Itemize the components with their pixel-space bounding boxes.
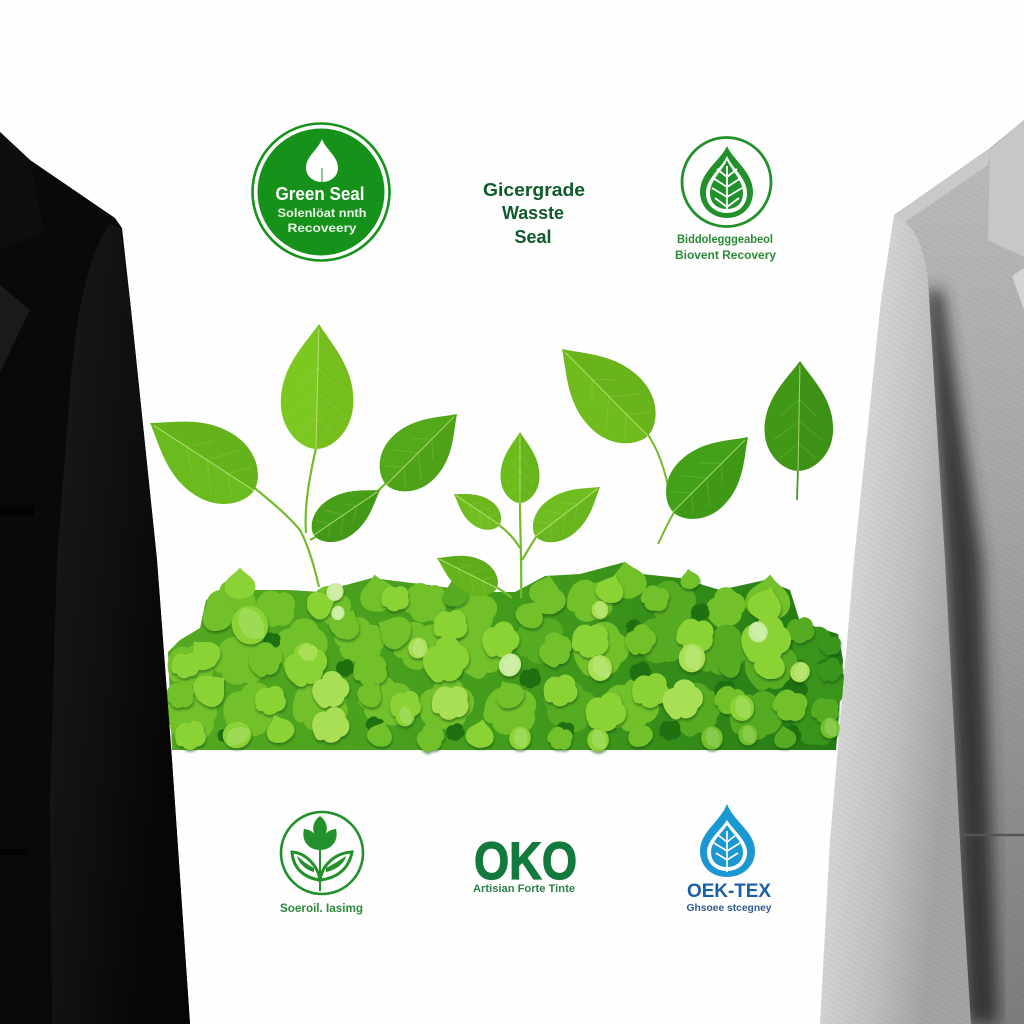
badge text: Recoveery [288, 221, 357, 235]
grey jacket shoulder [894, 148, 990, 222]
leaf: lower middle leaf [302, 473, 392, 552]
floating dark leaf with stem [651, 415, 770, 544]
badge text: Solenlöat nnth [278, 208, 366, 220]
text seal: Gicergrade Wasste Seal: Seal [514, 227, 552, 247]
plant: large seedling on the left [130, 323, 478, 587]
badge text [276, 184, 366, 235]
black jacket [0, 132, 190, 1024]
icon: blue drop with leaf [700, 804, 755, 877]
logo: OKO: OKO [474, 832, 577, 891]
badge caption: Soeroil. Iasimg [280, 901, 363, 915]
black pocket flaps [0, 505, 34, 855]
text seal: Gicergrade Wasste Seal: Wasste [502, 203, 564, 223]
leaf: top large leaf [280, 323, 355, 450]
grey jacket shadow along the sleeve seam [926, 290, 998, 1024]
icon: sprout [292, 816, 352, 891]
black collar [0, 132, 44, 250]
badge caption [675, 232, 776, 262]
grey pocket seam [963, 834, 1024, 836]
leaf: small right leaf [523, 470, 613, 553]
foliage pile [155, 558, 854, 756]
grey collar [988, 120, 1024, 257]
logo text: OEK-TEX [687, 881, 771, 902]
badge: plant circle [280, 812, 363, 915]
logo: OKO: Artisian Forte Tinte [473, 883, 575, 895]
grey jacket [820, 120, 1024, 1024]
floating leaf with stem [537, 324, 673, 497]
badge text: Green Seal [276, 184, 364, 204]
floating leaf on right [764, 360, 834, 500]
grey lapel [1012, 268, 1024, 310]
badge: Green Seal [252, 124, 390, 260]
logo caption: Ghsoee stcegney [686, 902, 772, 914]
text seal: Gicergrade Wasste Seal: Gicergrade [483, 180, 585, 200]
logo: OEK-TEX [686, 804, 772, 914]
leaf: small top leaf [500, 432, 540, 503]
badge: Biodegradable leaf [675, 138, 776, 262]
badge caption: Biddolegggeabeol [677, 232, 773, 246]
leaf: right leaf [365, 393, 478, 506]
icon: leaf in drop [700, 146, 753, 218]
plant: small central seedling [429, 432, 613, 604]
leaf: small left leaf [446, 482, 508, 537]
leaf: low left leaf [429, 542, 505, 604]
leaf: left large leaf [130, 393, 274, 521]
black sleeve [50, 224, 190, 1024]
black lapel [0, 285, 30, 372]
grey sleeve [820, 215, 971, 1024]
text seal: Gicergrade Wasste Seal [483, 180, 585, 247]
icon: white drop [306, 139, 338, 182]
badge caption: Biovent Recovery [675, 248, 776, 262]
